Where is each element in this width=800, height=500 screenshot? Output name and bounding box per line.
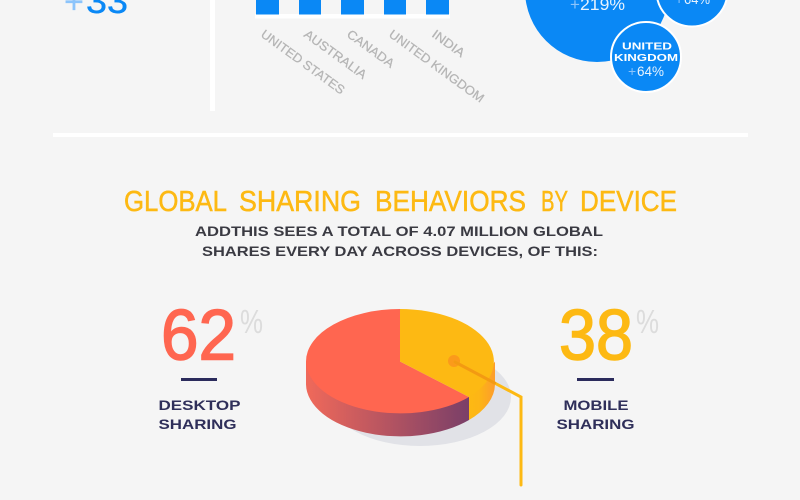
bubble: United Kingdom +64%: 64% <box>637 63 664 79</box>
heading: DEVICE <box>580 186 677 218</box>
stat: 38% mobile sharing: SHARING <box>556 416 635 432</box>
stat: 38% mobile sharing: 38 <box>559 296 633 376</box>
pie side: mobile <box>469 362 495 420</box>
stat: 62% desktop sharing: % <box>240 303 263 340</box>
heading: BY <box>541 186 568 218</box>
intro text: SHARES EVERY DAY ACROSS DEVICES, OF THIS: <box>202 243 598 259</box>
bubble: United Kingdom +64%: KINGDOM <box>614 52 678 64</box>
bubble: United Kingdom +64%: + <box>628 63 636 79</box>
heading <box>124 186 677 218</box>
pie top: desktop 62% <box>306 309 469 413</box>
callout line over pie <box>455 362 494 383</box>
callout line <box>455 362 521 485</box>
bar chart: top countries <box>255 0 450 18</box>
intro text <box>195 223 604 259</box>
bar chart country labels: UNITED KINGDOM <box>386 27 487 105</box>
stat: 38% mobile sharing <box>556 296 659 432</box>
bar chart country labels: CANADA <box>344 27 398 71</box>
stat: 38% mobile sharing: % <box>636 303 659 340</box>
callout dot <box>448 355 460 367</box>
stat: 62% desktop sharing: 62 <box>161 296 236 376</box>
stat: 62% desktop sharing: SHARING <box>158 416 237 432</box>
bubble: largest country +219% <box>525 0 669 62</box>
pie side: desktop <box>306 362 469 436</box>
section divider <box>53 133 748 137</box>
stat: 62% desktop sharing: DESKTOP <box>158 397 240 413</box>
pie top: mobile 38% <box>400 309 494 397</box>
heading: BEHAVIORS <box>375 186 526 218</box>
bubble: United Kingdom +64% <box>611 22 681 92</box>
stat: 38% mobile sharing: MOBILE <box>564 397 628 413</box>
bubble: United Kingdom +64%: UNITED <box>622 40 673 52</box>
bar chart country labels: UNITED STATES <box>258 27 347 97</box>
3D pie chart <box>306 309 521 485</box>
intro text: ADDTHIS SEES A TOTAL OF 4.07 MILLION GLOBAL <box>195 223 604 239</box>
bar chart country labels: INDIA <box>429 27 468 61</box>
bar chart country labels: AUSTRALIA <box>301 27 370 82</box>
bar chart country labels <box>258 27 487 105</box>
bubble: top right +64% <box>656 0 728 26</box>
vertical divider <box>210 0 215 111</box>
heading: GLOBAL <box>124 186 227 218</box>
partial stat: +33 <box>64 0 128 21</box>
pie shadow <box>329 348 511 446</box>
stat: 62% desktop sharing <box>158 296 263 432</box>
heading: SHARING <box>239 186 361 218</box>
